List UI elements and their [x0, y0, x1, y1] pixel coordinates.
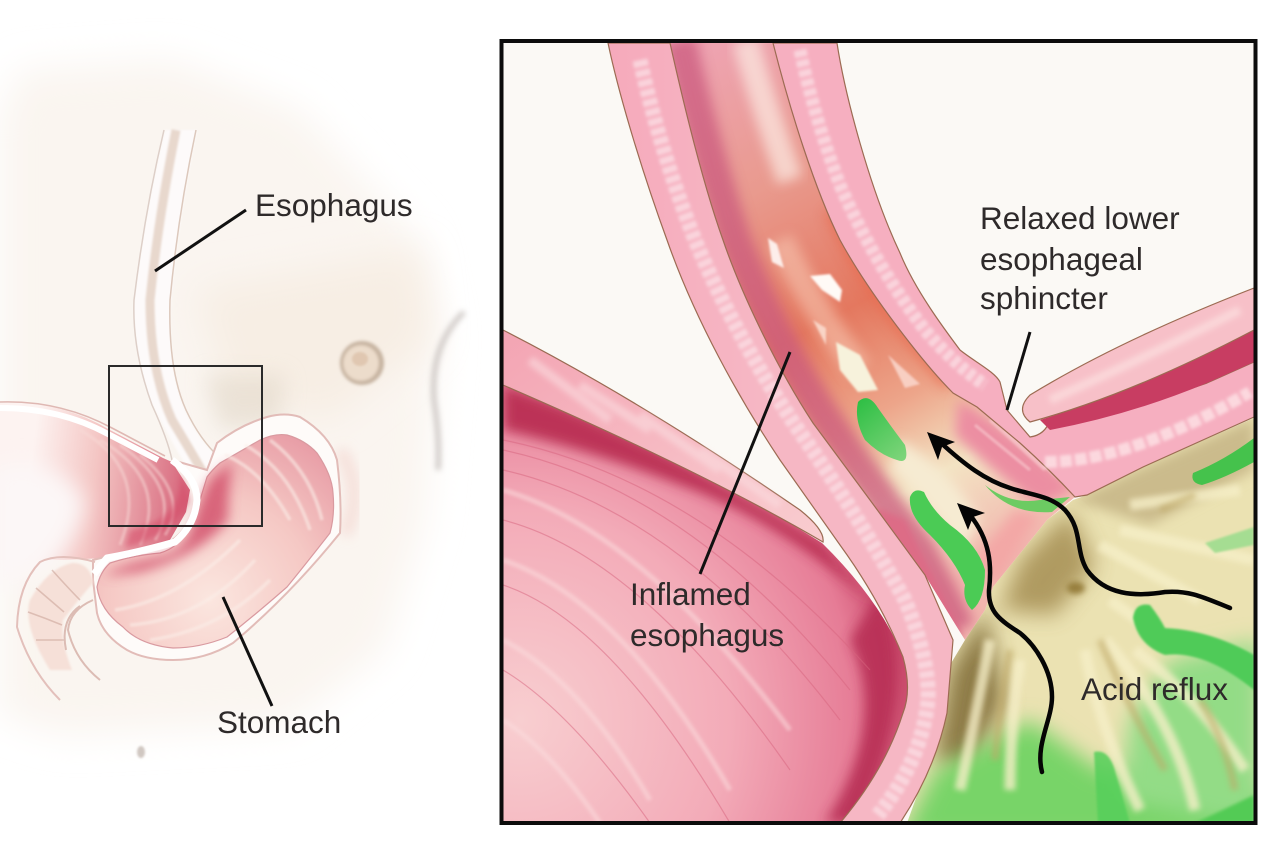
duodenum	[17, 557, 100, 700]
locator square	[109, 366, 262, 526]
skin tone of torso	[0, 60, 464, 735]
label: Inflamed esophagus	[630, 352, 790, 653]
esophagus tube	[133, 129, 214, 468]
label: Stomach	[217, 597, 341, 740]
label: Acid reflux: Acid reflux	[1081, 671, 1228, 707]
label: Inflamed esophagus: esophagus	[630, 617, 784, 653]
label: Stomach: Stomach	[217, 704, 341, 740]
green acid patches in esophagus	[857, 398, 1070, 610]
icon: nipple	[137, 341, 384, 758]
stomach wall flap	[503, 330, 823, 542]
panel: detail view of reflux	[502, 40, 1260, 840]
label: Relaxed lower esophageal sphincter	[980, 200, 1180, 410]
label: Inflamed esophagus: Inflamed	[630, 576, 751, 612]
main stomach	[93, 414, 341, 660]
esophagus right wall and sphincter	[773, 43, 1254, 497]
stomach interior with acid	[900, 410, 1260, 840]
label: Relaxed lower esophageal sphincter: esophageal	[980, 241, 1143, 277]
panel: torso with stomach overview	[0, 60, 464, 758]
label: Esophagus: Esophagus	[255, 187, 413, 223]
reflux arrow: upper	[927, 432, 1230, 608]
right stomach wall flap	[1022, 288, 1254, 430]
inflamed white patches	[768, 238, 920, 392]
reflux arrow: lower	[957, 503, 1052, 772]
esophagus left wall	[608, 43, 953, 823]
left fundus of stomach	[0, 401, 193, 560]
esophagus lumen	[670, 40, 1075, 640]
label: Esophagus	[155, 187, 413, 271]
label: Relaxed lower esophageal sphincter: Relaxed lower	[980, 200, 1180, 236]
large stomach body	[503, 385, 908, 823]
panel border	[502, 41, 1256, 823]
label: Relaxed lower esophageal sphincter: sphincter	[980, 280, 1108, 316]
